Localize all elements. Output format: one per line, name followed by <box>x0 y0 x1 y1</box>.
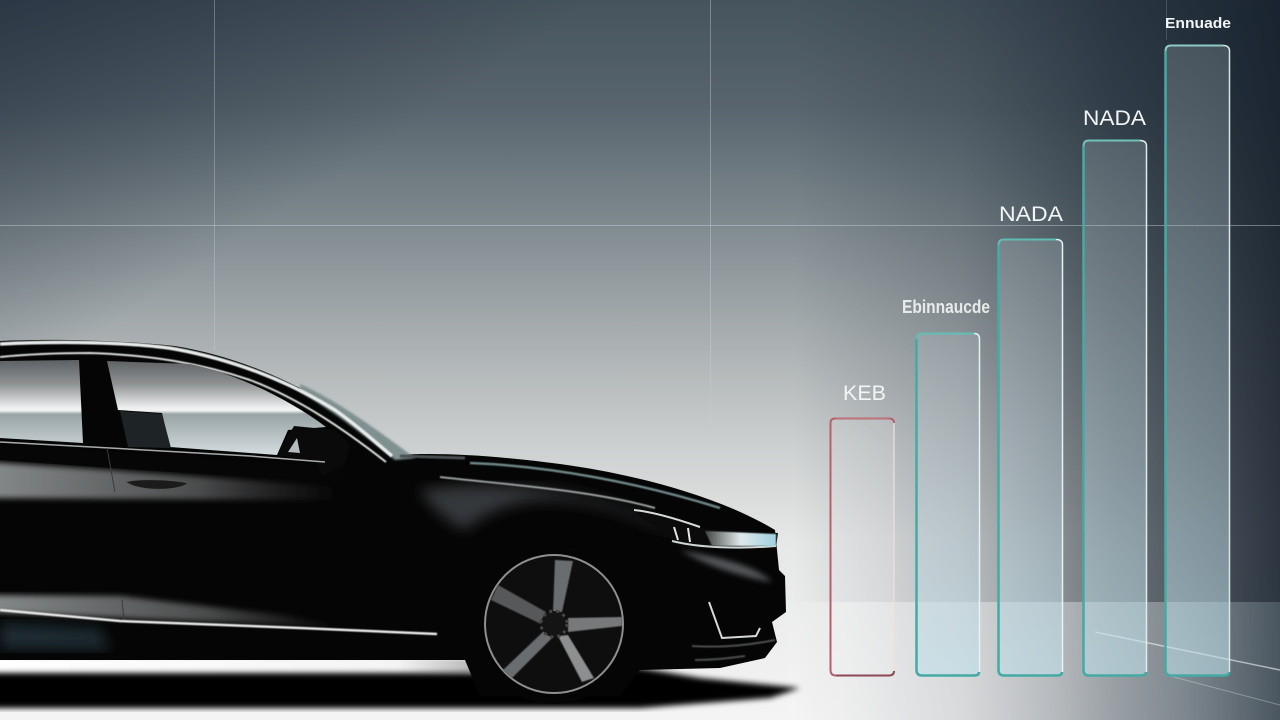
front side window <box>107 361 326 455</box>
wing mirror <box>277 426 350 476</box>
ground shadow <box>0 660 800 708</box>
label: KEB: KEB <box>843 382 886 405</box>
headlight <box>634 510 778 548</box>
door handle <box>126 480 188 489</box>
bar: KEB <box>830 418 894 676</box>
bar: Ennuade <box>1165 46 1230 676</box>
bar labels <box>843 15 1231 405</box>
spokes <box>491 560 622 682</box>
car <box>0 340 786 704</box>
bar: NADA second <box>1083 140 1147 676</box>
rim <box>485 555 623 693</box>
label: Ebinnaucde: Ebinnaucde <box>902 297 990 317</box>
car window trim <box>0 353 386 462</box>
window divider shade <box>120 411 171 448</box>
car roof trim <box>0 342 392 456</box>
rear side window <box>0 360 83 443</box>
bar: Ebinnaucde <box>916 334 980 676</box>
bumper intake chrome <box>709 602 760 638</box>
label: Ennuade: Ennuade <box>1165 15 1231 32</box>
label: NADA first: NADA <box>999 203 1063 226</box>
tyre <box>474 544 634 704</box>
bar: NADA first <box>998 240 1063 676</box>
hub <box>541 611 567 637</box>
sill chrome <box>0 610 437 634</box>
label: NADA second: NADA <box>1083 107 1146 130</box>
car lower door sheen <box>0 595 350 628</box>
car upper shoulder sheen <box>0 462 340 500</box>
bumper lip <box>692 640 775 660</box>
front bumper highlight <box>680 550 772 582</box>
bar chart <box>830 46 1230 676</box>
belt line chrome <box>0 442 325 462</box>
front wheel <box>474 544 634 704</box>
car lower blue sheen <box>0 622 110 650</box>
door seam <box>107 448 124 620</box>
car fender sheen <box>420 486 680 535</box>
windshield sheen <box>300 384 415 460</box>
car body <box>0 340 786 696</box>
black rail above shoulder <box>0 446 345 483</box>
hood highlights <box>400 456 720 508</box>
